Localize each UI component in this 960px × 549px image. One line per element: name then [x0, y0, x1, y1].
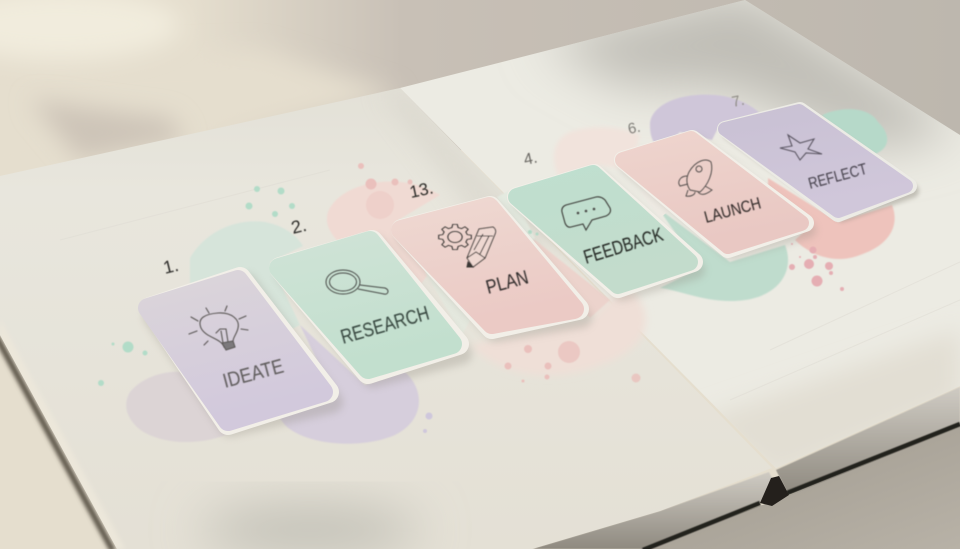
number 1: 1.: [161, 255, 181, 278]
icon: star: [780, 135, 822, 160]
paint splatters: [98, 163, 844, 433]
watercolour blobs: [126, 95, 895, 444]
ruled page lines: [60, 170, 960, 400]
label: research: RESEARCH: [338, 303, 432, 349]
pale strip between feedback and launch: [640, 188, 670, 218]
icon: light bulb: [189, 306, 248, 350]
page block and cover edge: [0, 336, 960, 549]
blob: lilac lower left: [126, 372, 232, 442]
label: ideate: IDEATE: [221, 356, 286, 393]
icon: gear and pencil: [439, 224, 496, 267]
number 13: 13.: [408, 178, 435, 202]
card 3: plan: [401, 207, 582, 332]
card 1: ideate: [148, 278, 332, 426]
blob: green top left: [190, 221, 303, 330]
card 6: reflect: [725, 110, 912, 215]
step numbers: [161, 92, 746, 278]
pale strip between research and plan: [425, 265, 470, 335]
icon: rocket: [679, 160, 712, 196]
number 7: 7.: [730, 92, 746, 111]
card 4: feedback: [517, 174, 696, 292]
blob: pink right: [768, 178, 895, 259]
label: feedback: FEEDBACK: [581, 225, 666, 269]
blob: green far right: [822, 109, 887, 155]
blob: pink behind feedback: [554, 127, 640, 180]
number 4: 4.: [522, 150, 539, 169]
label: plan: PLAN: [484, 267, 531, 299]
left page: [0, 88, 772, 549]
card 5: launch: [623, 139, 808, 252]
pale strip between plan and feedback: [497, 190, 535, 245]
card 2: research: [279, 241, 462, 378]
icon: magnifying glass: [326, 270, 388, 294]
number 6: 6.: [626, 119, 642, 138]
blob: pink lower middle: [470, 285, 646, 375]
blob: pink between plan and feedback: [525, 240, 610, 318]
blob: green under launch: [658, 208, 788, 301]
number 2: 2.: [289, 215, 309, 238]
blob: lilac under research: [275, 325, 419, 444]
blob: lilac top right: [650, 95, 762, 150]
label: reflect: REFLECT: [807, 161, 869, 193]
blob: pink top middle: [327, 181, 440, 285]
right page: [400, 0, 960, 468]
label: launch: LAUNCH: [702, 193, 763, 227]
icon: speech bubble: [562, 197, 610, 230]
